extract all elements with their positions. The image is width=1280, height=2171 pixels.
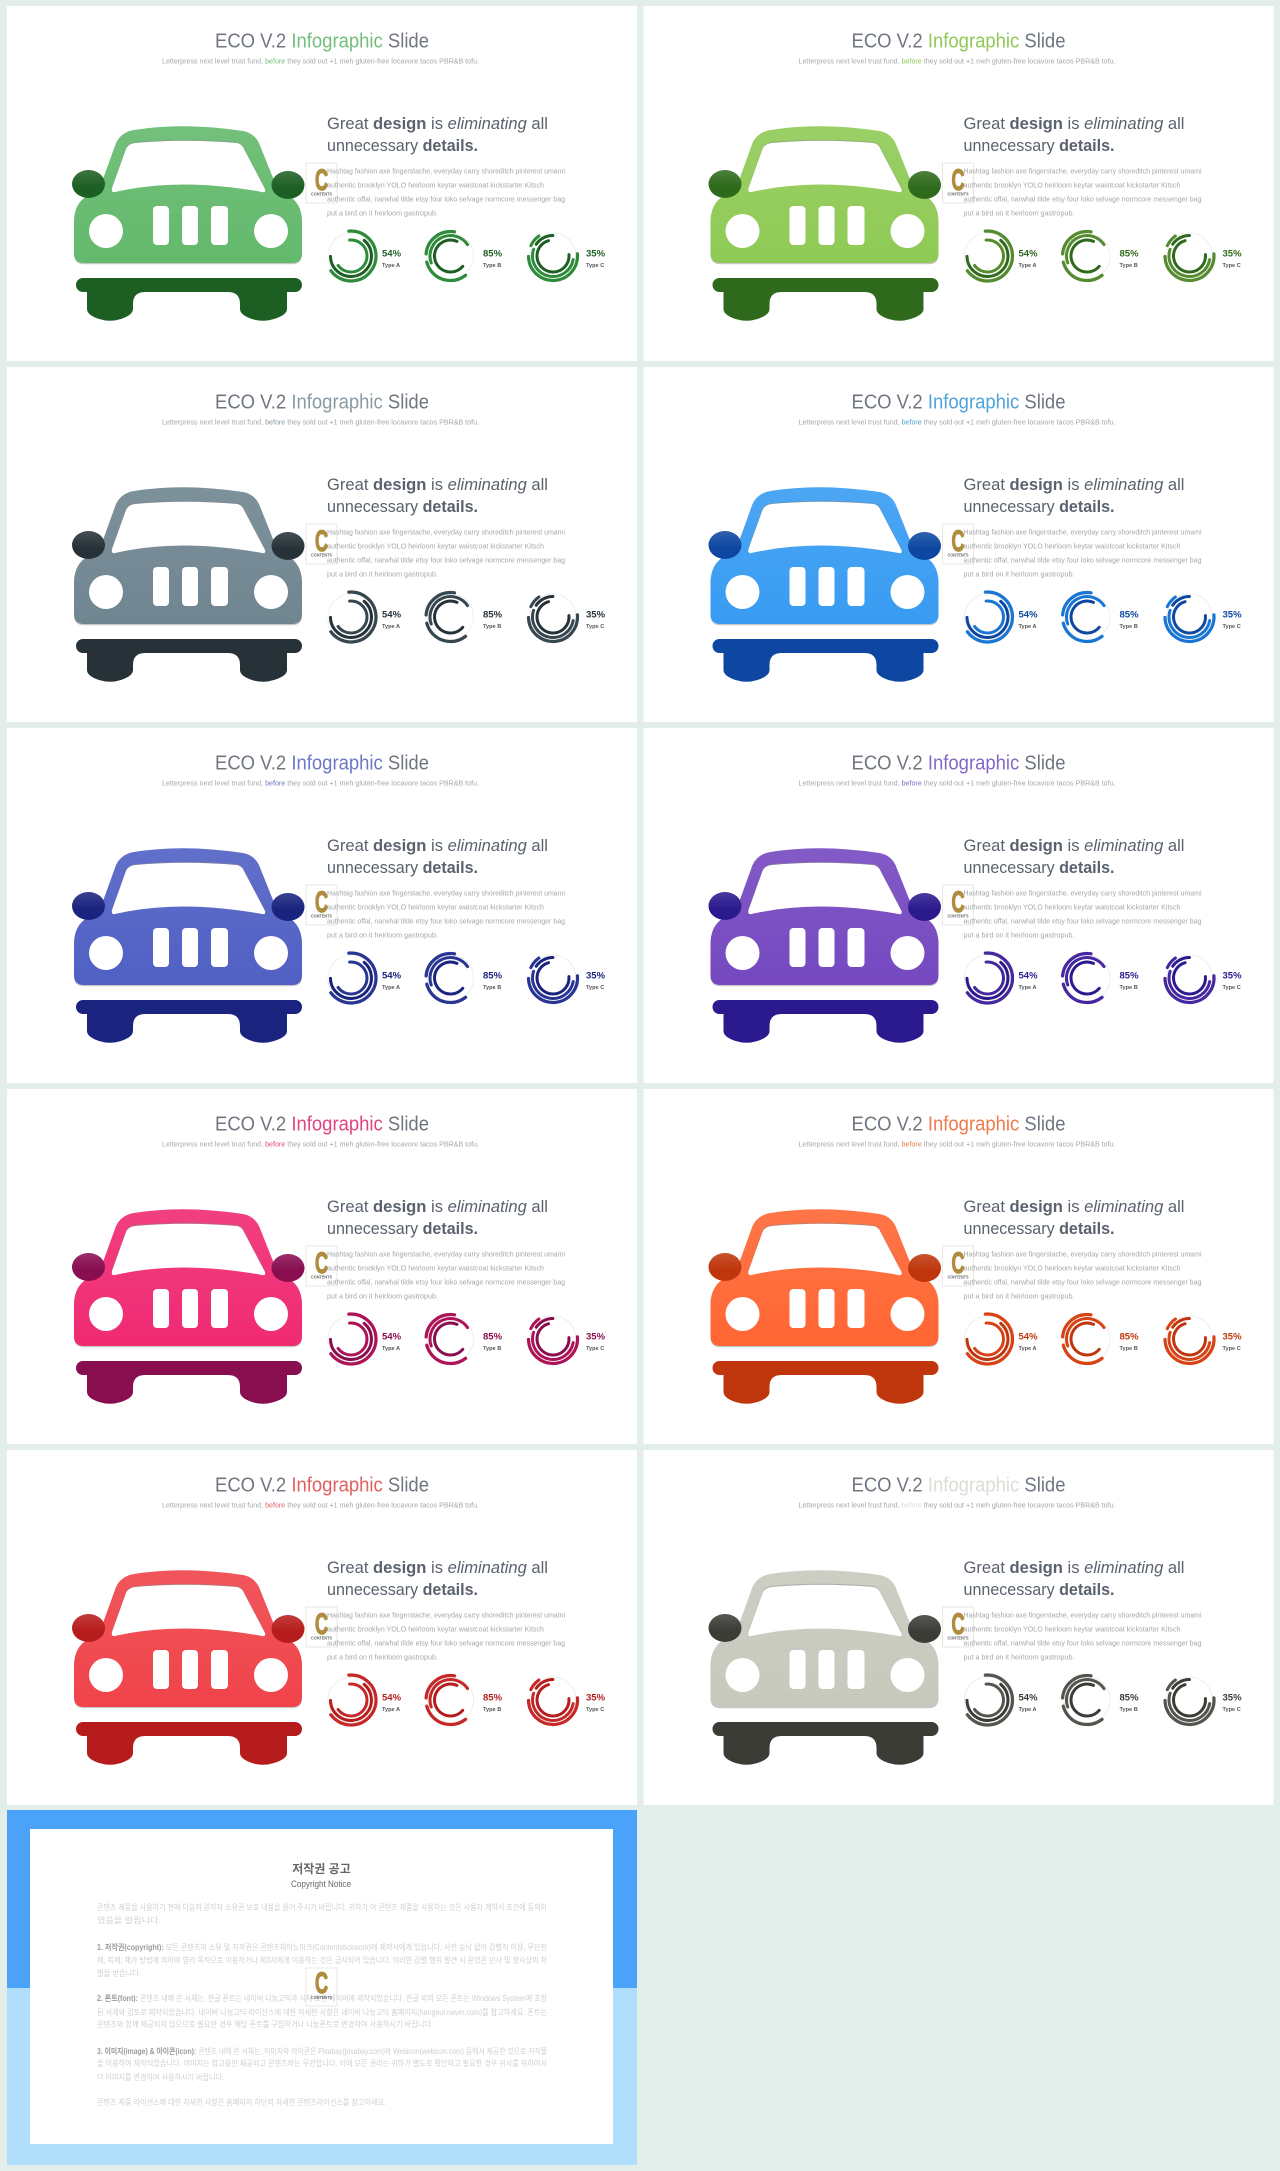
stat: 54% Type A: 54%	[382, 248, 402, 260]
title: ECO V.2 Infographic Slide	[215, 30, 429, 52]
subtitle: Letterpress next level trust fund, before they sold out +1 meh gluten-free locavore tacos PBR&B tofu.	[162, 1500, 479, 1510]
stat: 54% Type A	[382, 970, 402, 991]
body text	[964, 528, 1202, 578]
donut chart: Type B	[1053, 222, 1121, 290]
heading	[327, 836, 548, 877]
body text: authentic offal, narwhal tilde etsy four loko selvage normcore messenger bag	[327, 194, 565, 204]
stat: 54% Type A: Type A	[1018, 1707, 1037, 1713]
subtitle: Letterpress next level trust fund, before they sold out +1 meh gluten-free locavore tacos PBR&B tofu.	[798, 418, 1116, 426]
donut chart: Type B	[416, 944, 485, 1012]
donut chart: Type B	[416, 222, 485, 290]
stat: 35% Type C	[586, 1692, 606, 1713]
stat: 35% Type C: 35%	[1222, 1332, 1242, 1342]
stat: 85% Type B: 85%	[483, 610, 503, 620]
panel: orange slide	[644, 1089, 1274, 1444]
title: ECO V.2 Infographic Slide	[852, 752, 1066, 774]
stat: 54% Type A: Type A	[1018, 263, 1037, 269]
stat: 35% Type C: Type C	[1222, 624, 1241, 630]
logo watermark	[306, 1246, 337, 1286]
section: font: 된 서체와 검토로 제작되었습니다. 네이버 나눔고딕 라이선스에 대한 자세한 사항은 네이버 나눔고딕 홈페이지(hangeul.naver.com)를 참고하세요. 폰트는	[97, 2007, 547, 2017]
logo watermark: CONTENTS	[948, 1636, 969, 1640]
donut chart: Type B	[1053, 944, 1121, 1012]
heading	[964, 836, 1184, 877]
stat: 35% Type C: Type C	[586, 263, 604, 269]
logo watermark	[942, 163, 974, 203]
icon: car	[72, 1570, 304, 1765]
title: ECO V.2 Infographic Slide	[215, 1114, 429, 1136]
panel: lime slide	[644, 6, 1274, 361]
heading: Great design is eliminating all	[964, 475, 1184, 494]
stat: 85% Type B: 85%	[483, 970, 503, 982]
subtitle: Letterpress next level trust fund, before they sold out +1 meh gluten-free locavore tacos PBR&B tofu.	[798, 1140, 1116, 1148]
stat: 85% Type B: Type B	[483, 1346, 501, 1352]
body text: Hashtag fashion axe fingerstache, everyday carry shoreditch pinterest umami	[964, 1610, 1202, 1620]
body text	[327, 166, 565, 218]
heading: unnecessary details.	[327, 497, 478, 516]
body text: Hashtag fashion axe fingerstache, everyday carry shoreditch pinterest umami	[964, 888, 1202, 898]
heading: Great design is eliminating all	[964, 114, 1184, 133]
stat: 54% Type A	[1018, 970, 1038, 991]
stat: 54% Type A	[382, 1692, 402, 1713]
body text: authentic offal, narwhal tilde etsy four loko selvage normcore messenger bag	[327, 1278, 565, 1286]
heading: unnecessary details.	[964, 136, 1114, 155]
stat: 85% Type B	[1120, 248, 1139, 269]
donut chart: Type B	[1053, 583, 1121, 651]
heading	[327, 1197, 548, 1238]
title: ECO V.2 Infographic Slide	[215, 392, 429, 414]
stat: 54% Type A: Type A	[1018, 985, 1037, 991]
logo watermark: CONTENTS	[948, 552, 969, 558]
section: copyright: 재, 복제, 재가 방법에 의하여 영리 목적으로 이용하거나 제3자에게 이용하는 것은 금지되어 있습니다. 이러한 감별 행위 발견 시 운영은 민사 및 형사상의 처	[97, 1955, 547, 1965]
donut chart: Type B	[416, 583, 485, 651]
intro paragraph: 였음을 알립니다.	[97, 1915, 161, 1925]
logo watermark: C	[952, 1247, 964, 1280]
logo watermark: CONTENTS	[311, 1274, 332, 1280]
title: ECO V.2 Infographic Slide	[852, 1114, 1066, 1136]
body text	[327, 1250, 565, 1300]
body text: Hashtag fashion axe fingerstache, everyday carry shoreditch pinterest umami	[327, 1250, 565, 1258]
stat: 35% Type C: 35%	[586, 970, 606, 982]
stat: 35% Type C	[1222, 248, 1242, 269]
logo watermark: C	[952, 525, 964, 558]
stat: 54% Type A: 54%	[382, 610, 402, 620]
subtitle: Letterpress next level trust fund, before they sold out +1 meh gluten-free locavore tacos PBR&B tofu.	[162, 418, 479, 426]
stat: 85% Type B	[483, 1332, 503, 1352]
stat: 85% Type B	[483, 248, 503, 269]
body text: put a bird on it heirloom gastropub.	[964, 930, 1074, 940]
stat: 35% Type C: 35%	[1222, 610, 1242, 620]
donut chart: Type C	[1157, 1306, 1222, 1372]
icon: car	[708, 487, 941, 682]
logo watermark	[942, 1607, 974, 1647]
stat: 85% Type B: Type B	[483, 624, 501, 630]
logo watermark	[306, 1607, 337, 1647]
section: copyright: 1. 저작권(copyright): 모든 콘텐츠의 소유 및 저작권은 콘텐츠제이노마크(Contentstickwork)에 제작사에게 있습니다. 사전 승낙 없이 감별적 이용, 무단전	[97, 1942, 547, 1952]
stat: 54% Type A: Type A	[382, 985, 400, 991]
stat: 54% Type A	[382, 1332, 402, 1352]
donut chart: Type C	[1157, 223, 1222, 289]
section: image and icon: 을 이용하여 제작되었습니다. 이미지는 참고용만 제공되고 콘텐츠와는 무관합니다. 이에 모든 권리는 귀하가 별도로 확인하고 필요한 경우 귀사를 위하여서	[97, 2058, 547, 2068]
stat: 54% Type A: Type A	[382, 624, 400, 630]
stat: 35% Type C	[586, 1332, 606, 1352]
stat: 85% Type B: Type B	[1120, 263, 1138, 269]
stat: 35% Type C: 35%	[1222, 970, 1242, 982]
stat: 54% Type A	[1018, 610, 1038, 630]
subtitle: Letterpress next level trust fund, before they sold out +1 meh gluten-free locavore tacos PBR&B tofu.	[162, 56, 479, 66]
stat: 54% Type A	[382, 248, 402, 269]
title: ECO V.2 Infographic Slide	[852, 1474, 1066, 1496]
stat: 54% Type A: Type A	[382, 1346, 400, 1352]
stat: 35% Type C	[1222, 1692, 1242, 1713]
body text: put a bird on it heirloom gastropub.	[964, 570, 1074, 578]
stat: 85% Type B	[1120, 1332, 1139, 1352]
stat: 54% Type A: 54%	[1018, 970, 1038, 982]
stat: 85% Type B: Type B	[483, 1707, 501, 1713]
body text: authentic brooklyn YOLO heirloom keytar waistcoat kickstarter Kitsch	[964, 902, 1180, 912]
stat: 54% Type A: 54%	[1018, 1332, 1038, 1342]
stat: 85% Type B: Type B	[1120, 624, 1138, 630]
body text: authentic offal, narwhal tilde etsy four loko selvage normcore messenger bag	[327, 916, 565, 926]
stat: 35% Type C: Type C	[586, 1707, 604, 1713]
body text: authentic offal, narwhal tilde etsy four loko selvage normcore messenger bag	[964, 1278, 1202, 1286]
logo watermark: C	[315, 1967, 328, 2000]
heading	[327, 114, 548, 155]
body text: Hashtag fashion axe fingerstache, everyday carry shoreditch pinterest umami	[964, 166, 1202, 176]
heading: unnecessary details.	[327, 858, 478, 877]
stat: 54% Type A: 54%	[382, 970, 402, 982]
intro paragraph: 콘텐츠 제품을 사용하기 전에 다음의 원작자 소유권 보호 내용을 읽어 주시기 바랍니다. 귀하가 이 콘텐츠 제품을 사용하는 것은 사용자 계약서 조건에 동의하	[97, 1902, 548, 1912]
body text: put a bird on it heirloom gastropub.	[964, 208, 1074, 218]
logo watermark: C	[315, 886, 328, 919]
stat: 54% Type A: 54%	[1018, 610, 1038, 620]
heading	[964, 1197, 1184, 1238]
heading	[327, 475, 548, 516]
body text: put a bird on it heirloom gastropub.	[327, 1652, 438, 1662]
heading: Great design is eliminating all	[964, 1558, 1184, 1577]
stat: 35% Type C: Type C	[586, 985, 604, 991]
stat: 35% Type C	[586, 970, 606, 991]
heading: unnecessary details.	[964, 858, 1114, 877]
heading: unnecessary details.	[327, 1580, 478, 1599]
panel: red slide	[7, 1450, 637, 1805]
stat: 54% Type A	[1018, 248, 1038, 269]
stat: 35% Type C: 35%	[586, 248, 606, 260]
title: ECO V.2 Infographic Slide	[215, 752, 429, 774]
donut chart: Type B	[416, 1305, 485, 1373]
donut chart: Type C	[1157, 1667, 1222, 1733]
section: copyright: 벌을 받습니다.	[97, 1968, 141, 1978]
body text: authentic brooklyn YOLO heirloom keytar waistcoat kickstarter Kitsch	[327, 1264, 544, 1272]
section: font: 2. 폰트(font): 콘텐츠 내에 쓴 서체는, 한글 폰트는 네이버 나눔고딕과 서체 또한 네이버에 제작되었습니다. 한글 외의 모든 폰트는 Windows System에 포함	[97, 1993, 548, 2003]
section: image and icon: 다 이미지를 변경하여 사용하시기 바랍니다.	[97, 2072, 224, 2082]
stat: 54% Type A: Type A	[1018, 624, 1037, 630]
stat: 85% Type B: Type B	[1120, 1707, 1138, 1713]
heading: Great design is eliminating all	[964, 836, 1184, 855]
stat: 85% Type B: 85%	[1120, 610, 1139, 620]
logo watermark: CONTENTS	[948, 1274, 969, 1280]
body text: authentic offal, narwhal tilde etsy four loko selvage normcore messenger bag	[964, 1638, 1202, 1648]
logo watermark: CONTENTS	[311, 1995, 332, 2000]
donut chart: Type A	[322, 949, 380, 1007]
logo watermark: CONTENTS	[311, 1636, 332, 1640]
icon: car	[72, 848, 304, 1043]
icon: car	[708, 126, 941, 321]
donut chart: Type A	[322, 1310, 380, 1368]
stat: 85% Type B	[1120, 1692, 1139, 1713]
stat: 35% Type C: 35%	[586, 610, 606, 620]
logo watermark: C	[952, 886, 964, 919]
subtitle: Letterpress next level trust fund, before they sold out +1 meh gluten-free locavore tacos PBR&B tofu.	[162, 1140, 479, 1148]
stat: 54% Type A	[382, 610, 402, 630]
heading	[964, 1558, 1184, 1599]
stat: 54% Type A	[1018, 1332, 1038, 1352]
icon: car	[72, 487, 304, 682]
section: copyright	[97, 1942, 547, 1978]
body text: authentic brooklyn YOLO heirloom keytar waistcoat kickstarter Kitsch	[964, 542, 1180, 550]
heading: Great design is eliminating all	[327, 1558, 548, 1577]
icon: car	[708, 1209, 941, 1404]
icon: car	[72, 126, 304, 321]
body text: put a bird on it heirloom gastropub.	[964, 1652, 1074, 1662]
donut chart: Type B	[1053, 1666, 1121, 1734]
logo watermark	[306, 1967, 337, 2006]
panel: pink slide	[7, 1089, 637, 1444]
logo watermark	[942, 524, 974, 564]
logo watermark: C	[952, 1608, 964, 1641]
body text: Hashtag fashion axe fingerstache, everyday carry shoreditch pinterest umami	[964, 528, 1202, 536]
logo watermark: CONTENTS	[948, 914, 969, 918]
heading: unnecessary details.	[964, 1580, 1114, 1599]
body text: authentic brooklyn YOLO heirloom keytar waistcoat kickstarter Kitsch	[327, 542, 544, 550]
donut chart: Type B	[416, 1666, 485, 1734]
donut chart: Type A	[322, 588, 380, 646]
stat: 85% Type B	[1120, 970, 1139, 991]
heading	[964, 475, 1184, 516]
stat: 85% Type B: Type B	[483, 985, 501, 991]
donut chart: Type A	[322, 227, 380, 285]
stat: 54% Type A: 54%	[1018, 1692, 1038, 1704]
heading: unnecessary details.	[964, 497, 1114, 516]
logo watermark	[306, 524, 337, 564]
heading: Great design is eliminating all	[327, 1197, 548, 1216]
notice subtitle: Copyright Notice	[291, 1879, 351, 1889]
body text	[964, 1610, 1202, 1662]
body text: authentic brooklyn YOLO heirloom keytar waistcoat kickstarter Kitsch	[964, 1624, 1180, 1634]
heading: unnecessary details.	[964, 1219, 1114, 1238]
stat: 35% Type C: Type C	[586, 1346, 604, 1352]
panel: slate slide	[7, 367, 637, 722]
section: image and icon: 3. 이미지(image) & 아이콘(icon): 콘텐츠 내에 쓴 서체는, 이미지와 아이콘은 Pixabay(pixabay.com)와 Webicon(webicon.com) 등에서 제공한 것으로 저작물	[97, 2046, 547, 2056]
icon: car	[708, 1570, 941, 1765]
donut chart: Type C	[1157, 945, 1222, 1011]
donut chart: Type A	[959, 588, 1016, 646]
icon: car	[72, 1209, 304, 1404]
title: ECO V.2 Infographic Slide	[852, 392, 1066, 414]
logo watermark: C	[315, 1247, 328, 1280]
subtitle: Letterpress next level trust fund, before they sold out +1 meh gluten-free locavore tacos PBR&B tofu.	[798, 778, 1116, 788]
body text	[327, 1610, 565, 1662]
body text: Hashtag fashion axe fingerstache, everyday carry shoreditch pinterest umami	[327, 888, 565, 898]
body text: put a bird on it heirloom gastropub.	[327, 570, 438, 578]
stat: 85% Type B	[483, 610, 503, 630]
intro paragraph	[97, 1902, 548, 1925]
donut chart: Type A	[959, 1310, 1016, 1368]
title: ECO V.2 Infographic Slide	[852, 30, 1066, 52]
heading: unnecessary details.	[327, 1219, 478, 1238]
stat: 35% Type C: Type C	[1222, 985, 1241, 991]
donut chart: Type C	[520, 223, 586, 289]
stat: 35% Type C: Type C	[1222, 263, 1241, 269]
stat: 85% Type B: 85%	[1120, 1332, 1139, 1342]
donut chart: Type A	[322, 1671, 380, 1729]
panel: green slide	[7, 6, 637, 361]
stat: 54% Type A: 54%	[382, 1332, 402, 1342]
body text: authentic offal, narwhal tilde etsy four loko selvage normcore messenger bag	[327, 1638, 565, 1648]
donut chart: Type C	[520, 584, 586, 650]
stat: 54% Type A: Type A	[382, 1707, 400, 1713]
stat: 54% Type A	[1018, 1692, 1038, 1713]
logo watermark: C	[315, 164, 328, 197]
stat: 85% Type B: 85%	[483, 1332, 503, 1342]
stat: 54% Type A: Type A	[1018, 1346, 1037, 1352]
logo watermark	[942, 885, 974, 925]
body text: Hashtag fashion axe fingerstache, everyday carry shoreditch pinterest umami	[327, 528, 565, 536]
stat: 85% Type B	[483, 1692, 503, 1713]
stat: 85% Type B	[1120, 610, 1139, 630]
heading: unnecessary details.	[327, 136, 478, 155]
body text: authentic offal, narwhal tilde etsy four loko selvage normcore messenger bag	[964, 556, 1202, 564]
subtitle: Letterpress next level trust fund, before they sold out +1 meh gluten-free locavore tacos PBR&B tofu.	[798, 56, 1116, 66]
body text: authentic brooklyn YOLO heirloom keytar waistcoat kickstarter Kitsch	[327, 180, 544, 190]
body text: authentic offal, narwhal tilde etsy four loko selvage normcore messenger bag	[327, 556, 565, 564]
heading	[327, 1558, 548, 1599]
body text: put a bird on it heirloom gastropub.	[327, 930, 438, 940]
stat: 35% Type C: Type C	[1222, 1707, 1241, 1713]
logo watermark	[306, 885, 337, 925]
body text: authentic offal, narwhal tilde etsy four loko selvage normcore messenger bag	[964, 194, 1202, 204]
stat: 54% Type A: 54%	[1018, 248, 1038, 260]
donut chart: Type A	[959, 949, 1016, 1007]
logo watermark	[942, 1246, 974, 1286]
donut chart: Type A	[959, 1671, 1016, 1729]
heading: Great design is eliminating all	[327, 836, 548, 855]
donut chart: Type A	[959, 227, 1016, 285]
donut chart: Type C	[520, 1667, 586, 1733]
heading: Great design is eliminating all	[327, 475, 548, 494]
panel: indigo slide	[7, 728, 637, 1083]
stat: 85% Type B: 85%	[1120, 970, 1139, 982]
body text: put a bird on it heirloom gastropub.	[964, 1292, 1074, 1300]
stat: 35% Type C: 35%	[1222, 1692, 1242, 1704]
stat: 85% Type B: 85%	[1120, 248, 1139, 260]
body text: authentic brooklyn YOLO heirloom keytar waistcoat kickstarter Kitsch	[964, 1264, 1180, 1272]
stat: 85% Type B: 85%	[483, 248, 503, 260]
icon: car	[708, 848, 941, 1043]
stat: 85% Type B: 85%	[483, 1692, 503, 1704]
body text: Hashtag fashion axe fingerstache, everyday carry shoreditch pinterest umami	[327, 166, 565, 176]
donut chart: Type C	[520, 1306, 586, 1372]
heading: Great design is eliminating all	[327, 114, 548, 133]
body text: authentic brooklyn YOLO heirloom keytar waistcoat kickstarter Kitsch	[327, 902, 544, 912]
body text: Hashtag fashion axe fingerstache, everyday carry shoreditch pinterest umami	[964, 1250, 1202, 1258]
heading	[964, 114, 1184, 155]
body text: put a bird on it heirloom gastropub.	[327, 208, 438, 218]
subtitle: Letterpress next level trust fund, before they sold out +1 meh gluten-free locavore tacos PBR&B tofu.	[162, 778, 479, 788]
subtitle: Letterpress next level trust fund, before they sold out +1 meh gluten-free locavore tacos PBR&B tofu.	[798, 1500, 1116, 1510]
body text: Hashtag fashion axe fingerstache, everyday carry shoreditch pinterest umami	[327, 1610, 565, 1620]
body text	[964, 888, 1202, 940]
license footer: 콘텐츠 제품 라이선스에 대한 자세한 사항은 홈페이지 하단의 자세한 콘텐츠라이선스를 참고하세요.	[97, 2097, 386, 2107]
stat: 54% Type A: 54%	[382, 1692, 402, 1704]
stat: 35% Type C	[586, 248, 606, 269]
stat: 35% Type C	[1222, 1332, 1242, 1352]
stat: 35% Type C: 35%	[586, 1692, 606, 1704]
donut chart: Type C	[1157, 584, 1222, 650]
body text: authentic brooklyn YOLO heirloom keytar waistcoat kickstarter Kitsch	[964, 180, 1180, 190]
body text	[327, 528, 565, 578]
notice title: 저작권 공고	[292, 1861, 351, 1876]
donut chart: Type C	[520, 945, 586, 1011]
logo watermark: CONTENTS	[948, 192, 969, 196]
body text: put a bird on it heirloom gastropub.	[327, 1292, 438, 1300]
panel: grey slide	[644, 1450, 1274, 1805]
logo watermark: C	[315, 525, 328, 558]
body text	[964, 166, 1202, 218]
panel: blue slide	[644, 367, 1274, 722]
section: font	[97, 1993, 548, 2029]
logo watermark: CONTENTS	[311, 192, 332, 196]
stat: 85% Type B	[483, 970, 503, 991]
logo watermark: CONTENTS	[311, 914, 332, 918]
stat: 35% Type C	[586, 610, 606, 630]
logo watermark	[306, 163, 337, 203]
stat: 35% Type C	[1222, 610, 1242, 630]
stat: 35% Type C: Type C	[586, 624, 604, 630]
section: image and icon	[97, 2046, 547, 2082]
heading: Great design is eliminating all	[964, 1197, 1184, 1216]
notice card	[30, 1829, 613, 2144]
stat: 54% Type A: Type A	[382, 263, 400, 269]
stat: 85% Type B: Type B	[483, 263, 501, 269]
stat: 85% Type B: 85%	[1120, 1692, 1139, 1704]
panel: purple slide	[644, 728, 1274, 1083]
stat: 35% Type C: Type C	[1222, 1346, 1241, 1352]
stat: 85% Type B: Type B	[1120, 985, 1138, 991]
title: ECO V.2 Infographic Slide	[215, 1474, 429, 1496]
body text	[327, 888, 565, 940]
stat: 35% Type C	[1222, 970, 1242, 991]
logo watermark: CONTENTS	[311, 552, 332, 558]
stat: 85% Type B: Type B	[1120, 1346, 1138, 1352]
donut chart: Type B	[1053, 1305, 1121, 1373]
stat: 35% Type C: 35%	[1222, 248, 1242, 260]
body text: authentic brooklyn YOLO heirloom keytar waistcoat kickstarter Kitsch	[327, 1624, 544, 1634]
stat: 35% Type C: 35%	[586, 1332, 606, 1342]
logo watermark: C	[952, 164, 964, 197]
body text: authentic offal, narwhal tilde etsy four loko selvage normcore messenger bag	[964, 916, 1202, 926]
panel: copyright notice	[7, 1810, 637, 2165]
section: font: 콘텐츠와 함께 제공되지 않으므로 필요한 경우 해당 폰트를 구입하거나 나눔폰트로 변경하여 사용하시기 바랍니다.	[97, 2019, 433, 2029]
body text	[964, 1250, 1202, 1300]
logo watermark: C	[315, 1608, 328, 1641]
